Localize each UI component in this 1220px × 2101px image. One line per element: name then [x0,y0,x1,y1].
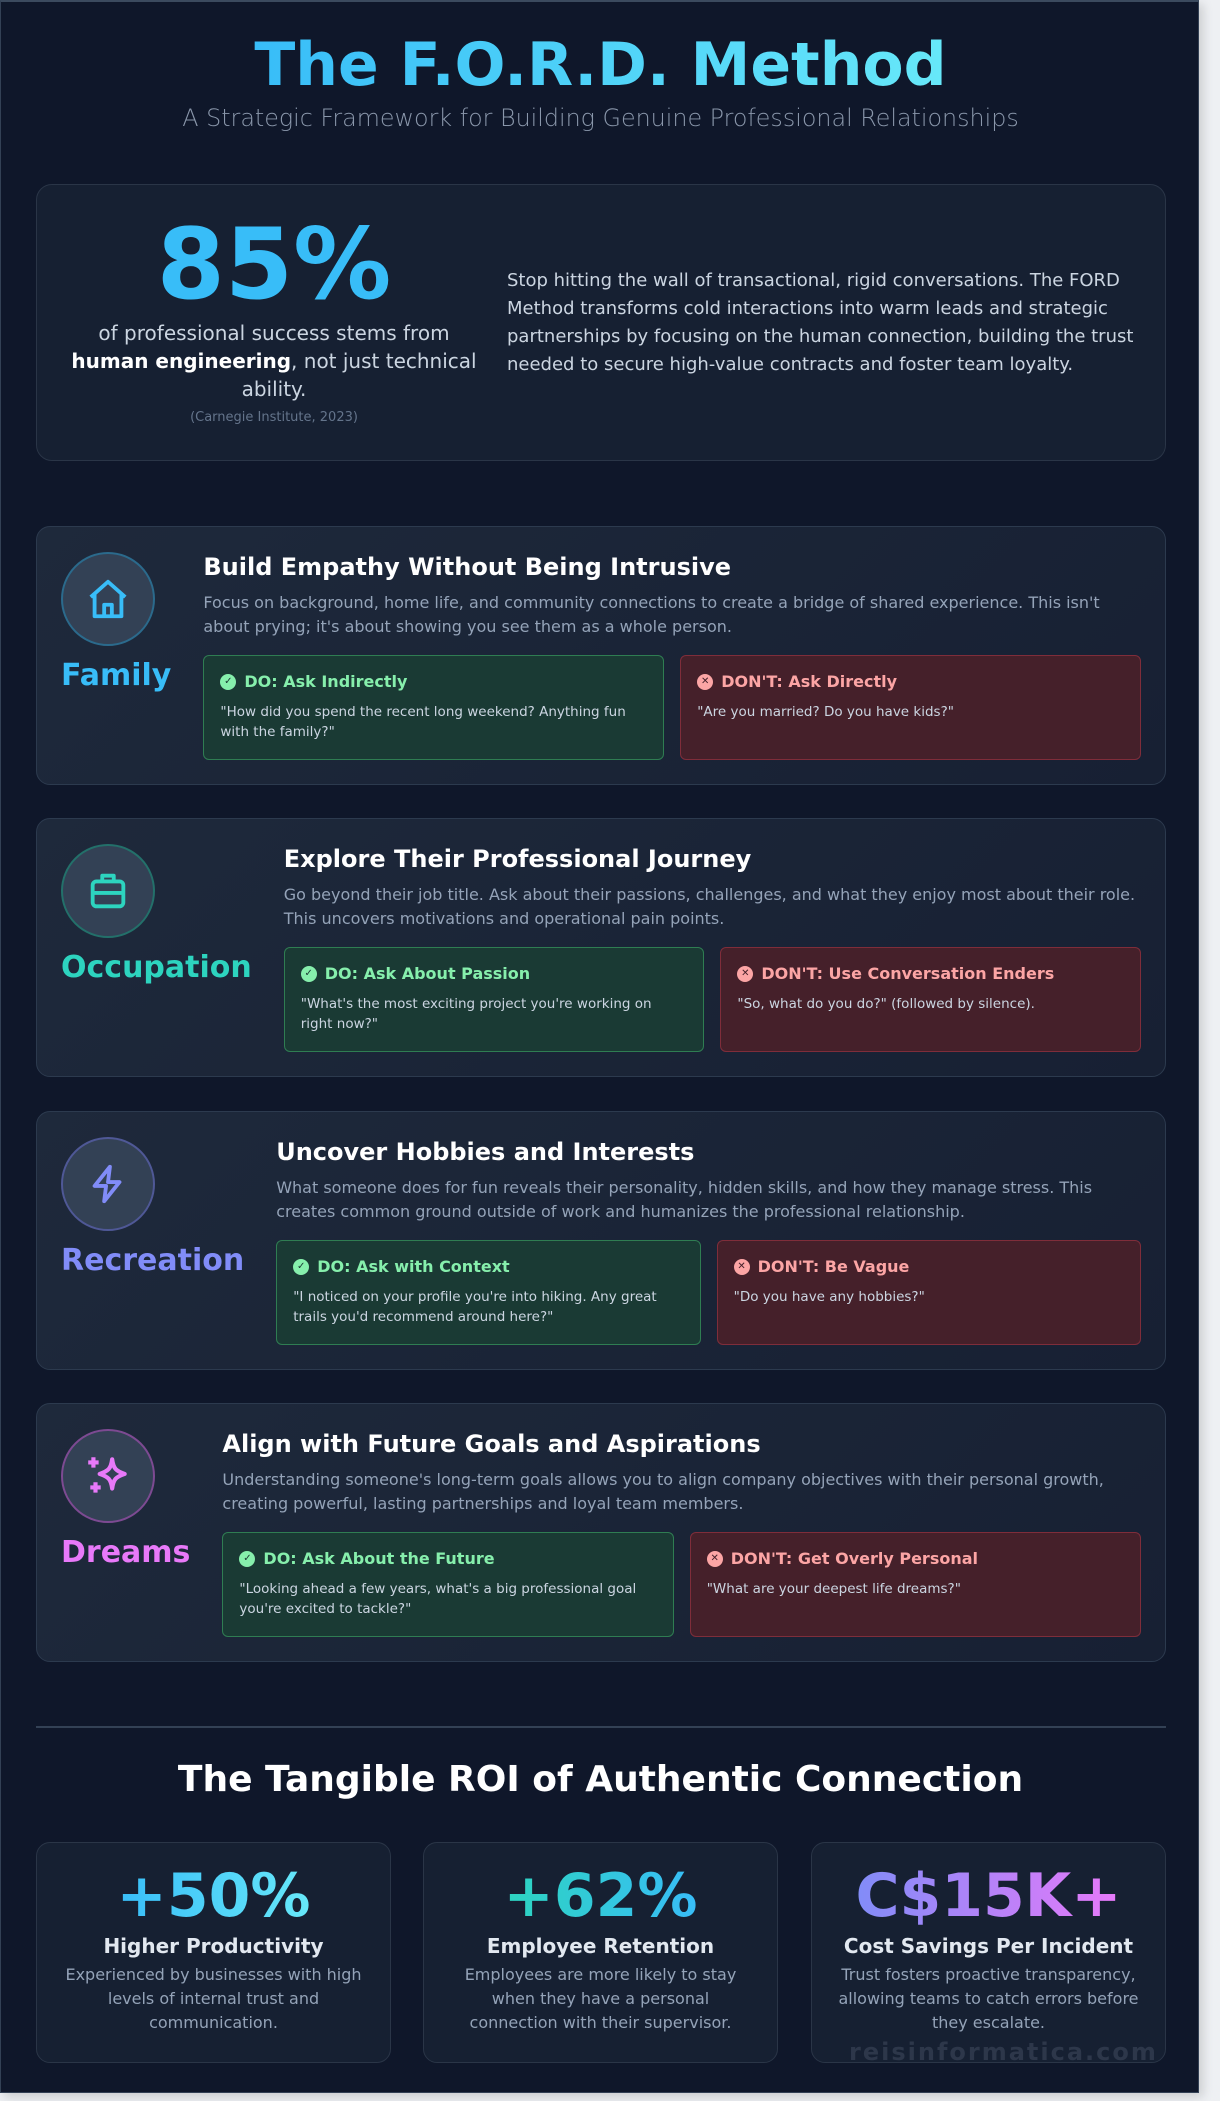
stat: 85%: (Carnegie Institute, 2023) [190,410,358,425]
icon: lightning: Recreation [61,1243,244,1278]
stat card: cost savings: Trust fosters proactive transparency, allowing teams to catch errors before they escalate. [838,1965,1139,2032]
stat card: retention [423,1842,778,2063]
family content: Build Empathy Without Being Intrusive [203,553,731,581]
dreams content [222,1430,1141,1637]
intro paragraph: Stop hitting the wall of transactional, rigid conversations. The FORD Method transforms cold interactions into warm leads and strategic partnerships by focusing on the human connection, building the trust needed to secure high-value contracts and foster team loyalty. [507,270,1133,375]
stat card: productivity [36,1842,391,2063]
title: The F.O.R.D. Method [254,30,947,100]
stat: 85%: 85% [157,208,391,322]
subtitle: A Strategic Framework for Building Genuine Professional Relationships [182,104,1019,132]
occupation content: ✓ [305,968,313,979]
panel: recreation [36,1111,1166,1370]
occupation content: Go beyond their job title. Ask about their passions, challenges, and what they enjoy most about their role. This uncovers motivations and operational pain points. [284,885,1135,928]
occupation content: ✕ [741,968,750,979]
icon: house: Family [61,658,171,693]
dreams content: ✓ [243,1553,252,1564]
recreation content: "Do you have any hobbies?" [734,1289,925,1305]
stat card: cost savings: Cost Savings Per Incident [844,1934,1133,1958]
occupation content: DO: Ask About Passion [325,964,530,983]
dreams content: Align with Future Goals and Aspirations [222,1430,761,1458]
dreams content: DON'T: Get Overly Personal [731,1549,978,1568]
panel: dreams [36,1403,1166,1662]
family content: DO: Ask Indirectly [244,672,407,691]
stat card: retention: Employees are more likely to stay when they have a personal connection with their supervisor. [465,1965,736,2032]
stat: 85% [71,208,477,425]
stat: 85%: of professional success stems from human engineering, not just technical ability. [71,321,477,401]
icon: lightning [61,1137,244,1278]
stat card: retention: Employee Retention [487,1934,714,1958]
panel: family [36,526,1166,785]
family content: "How did you spend the recent long weekend? Anything fun with the family?" [220,704,626,740]
stat card: productivity: +50% [117,1861,310,1931]
stat card: cost savings: C$15K+ [855,1861,1122,1931]
icon: sparkles [61,1429,190,1570]
icon: house [61,552,171,693]
icon: sparkles: Dreams [61,1535,190,1570]
occupation content: "So, what do you do?" (followed by silence). [737,996,1035,1012]
family content: Focus on background, home life, and community connections to create a bridge of shared experience. This isn't about prying; it's about showing you see them as a whole person. [203,593,1100,636]
family content: "Are you married? Do you have kids?" [697,704,954,720]
dreams content: "Looking ahead a few years, what's a big professional goal you're excited to tackle?" [239,1581,636,1617]
stat card: cost savings [811,1842,1166,2063]
recreation content: DO: Ask with Context [317,1257,510,1276]
recreation content: What someone does for fun reveals their personality, hidden skills, and how they manage stress. This creates common ground outside of work and humanizes the professional relationship. [276,1178,1092,1221]
family content: ✓ [224,676,233,687]
stat card: productivity: Experienced by businesses with high levels of internal trust and communication. [65,1965,362,2032]
stat card: productivity: Higher Productivity [103,1934,324,1958]
dreams content: "What are your deepest life dreams?" [707,1581,961,1597]
watermark: reisinformatica.com [849,2038,1158,2066]
recreation content: "I noticed on your profile you're into hiking. Any great trails you'd recommend around here?" [293,1289,657,1325]
recreation content [276,1138,1141,1345]
recreation content: ✓ [297,1261,305,1272]
icon: briefcase [61,844,252,985]
recreation content: DON'T: Be Vague [758,1257,909,1276]
recreation content: Uncover Hobbies and Interests [276,1138,694,1166]
dreams content: DO: Ask About the Future [263,1549,495,1568]
recreation content: ✕ [737,1261,746,1272]
panel: occupation [36,818,1166,1077]
heading: ROI: The Tangible ROI of Authentic Connection [178,1759,1023,1800]
icon: briefcase: Occupation [61,950,252,985]
occupation content: Explore Their Professional Journey [284,845,751,873]
dreams content: Understanding someone's long-term goals allows you to align company objectives with their personal growth, creating powerful, lasting partnerships and loyal team members. [222,1470,1104,1513]
family content: DON'T: Ask Directly [721,672,897,691]
occupation content: DON'T: Use Conversation Enders [761,964,1054,983]
stat card: retention: +62% [504,1861,697,1931]
dreams content: ✕ [710,1553,719,1564]
occupation content [284,845,1141,1052]
family content [203,553,1141,760]
occupation content: "What's the most exciting project you're working on right now?" [301,996,652,1032]
family content: ✕ [701,676,709,687]
panel: key statistic [36,184,1166,461]
